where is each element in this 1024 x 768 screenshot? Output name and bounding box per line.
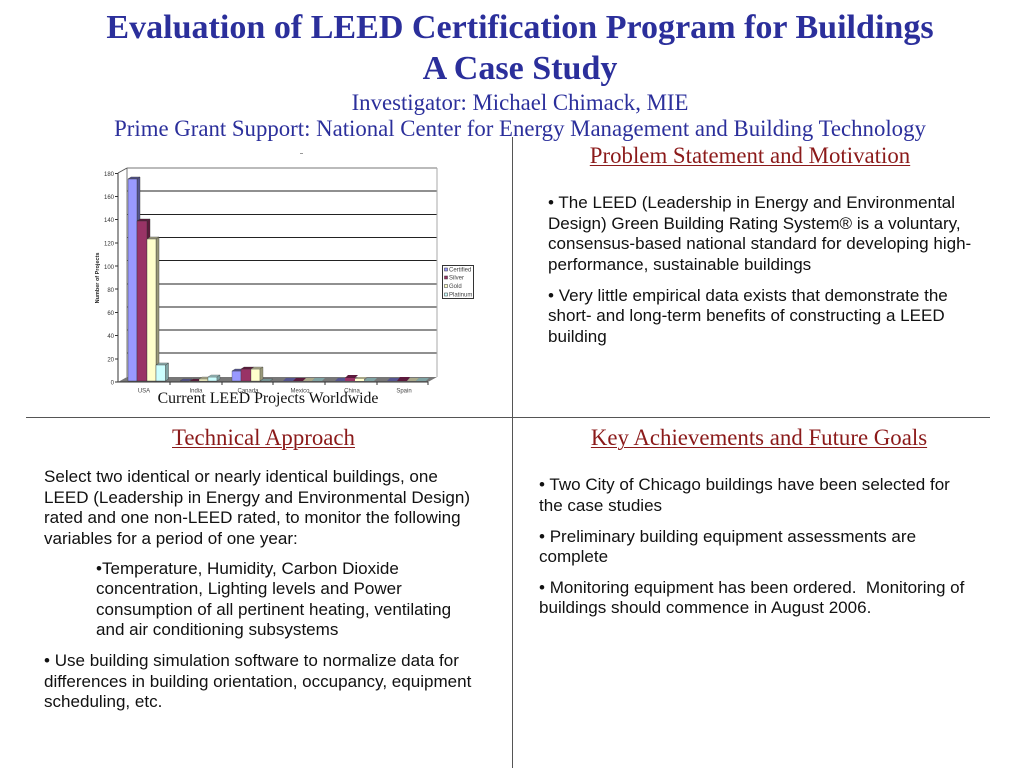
y axis labels: 140 <box>104 218 115 224</box>
text: simulation bullet: • Use building simulation software to normalize data for <box>44 651 459 670</box>
text: problem statement: consensus-based national standard for developing high- <box>548 234 971 253</box>
text: simulation bullet <box>44 651 472 711</box>
China bars <box>335 375 377 381</box>
text: approach intro: Select two identical or nearly identical buildings, one <box>44 467 438 486</box>
text: approach intro: LEED (Leadership in Energy and Environmental Design) <box>44 488 470 506</box>
text: achievement three: • Monitoring equipment has been ordered. Monitoring of <box>539 578 964 596</box>
text: problem statement: Design) Green Building Rating System® is a voluntary, <box>548 214 961 232</box>
text: simulation bullet: scheduling, etc. <box>44 692 162 711</box>
chart caption: Current LEED Projects Worldwide <box>158 390 378 407</box>
vertical divider <box>512 137 513 768</box>
y axis labels: 120 <box>104 242 115 248</box>
text: achievement one: the case studies <box>539 496 662 514</box>
text: achievement two <box>539 526 916 566</box>
text: problem statement second bullet: short- and long-term benefits of constructing a LEED <box>548 306 945 325</box>
x axis labels: India <box>189 388 203 394</box>
y axis labels <box>104 172 115 386</box>
y axis labels: 40 <box>107 334 115 340</box>
legend: Gold <box>449 284 462 290</box>
horizontal divider <box>26 417 990 418</box>
heading: technical approach: Technical Approach <box>172 425 355 450</box>
legend <box>442 266 474 298</box>
y axis title: Number of Projects <box>95 253 101 303</box>
grant support line: Prime Grant Support: National Center for Energy Management and Building Technology <box>114 116 926 141</box>
text: approach intro: variables for a period of one year: <box>44 528 298 548</box>
text: achievement one <box>539 475 950 514</box>
y axis labels: 180 <box>104 172 115 178</box>
legend: Certified <box>449 268 471 274</box>
text: simulation bullet: differences in building orientation, occupancy, equipment <box>44 672 471 690</box>
Mexico bars <box>283 378 325 381</box>
text: achievement two: • Preliminary building equipment assessments are <box>539 526 916 546</box>
title: Evaluation of LEED Certification Program for Buildings <box>106 9 934 46</box>
heading: problem statement: Problem Statement and Motivation <box>590 143 910 168</box>
text: problem statement second bullet <box>548 286 948 346</box>
text: monitored variables <box>96 558 451 639</box>
text: problem statement second bullet: • Very little empirical data exists that demonstrate the <box>548 286 948 304</box>
title: A Case Study <box>423 50 617 87</box>
Canada bars <box>232 367 273 381</box>
text: approach intro: rated and one non-LEED rated, to monitor the following <box>44 508 461 527</box>
title <box>106 9 934 87</box>
text: monitored variables: concentration, Lighting levels and Power <box>96 579 402 598</box>
x axis labels: Mexico <box>290 388 310 394</box>
y axis labels: 100 <box>104 265 115 271</box>
India bars <box>180 375 220 381</box>
x axis labels <box>138 388 412 394</box>
text: problem statement second bullet: building <box>548 326 607 346</box>
text: approach intro <box>44 467 470 548</box>
y axis labels: 60 <box>107 311 115 317</box>
y axis labels: 20 <box>107 358 115 364</box>
text: achievement three: buildings should commence in August 2006. <box>539 598 871 617</box>
text: monitored variables: consumption of all pertinent heating, ventilating <box>96 600 451 618</box>
x axis labels: Canada <box>237 388 259 394</box>
y axis labels: 0 <box>111 380 115 386</box>
text: achievement one: • Two City of Chicago buildings have been selected for <box>539 475 950 494</box>
y axis labels: 80 <box>107 288 115 294</box>
legend: Platinum <box>449 292 472 298</box>
heading: key achievements: Key Achievements and Future Goals <box>591 425 927 450</box>
text: achievement two: complete <box>539 547 608 566</box>
investigator line: Investigator: Michael Chimack, MIE <box>352 90 688 115</box>
bar chart: current LEED projects worldwide <box>95 153 474 394</box>
text: problem statement: performance, sustainable buildings <box>548 254 811 274</box>
text: achievement three <box>539 578 964 617</box>
text: monitored variables: •Temperature, Humidity, Carbon Dioxide <box>96 558 399 578</box>
USA bars <box>128 177 168 381</box>
x axis labels: USA <box>138 388 150 394</box>
text: problem statement: • The LEED (Leadership in Energy and Environmental <box>548 193 955 212</box>
x axis labels: China <box>344 388 360 394</box>
text: monitored variables: and air conditioning subsystems <box>96 620 338 639</box>
Spain bars <box>387 377 429 381</box>
tiny dash above chart <box>300 152 303 154</box>
legend: Silver <box>449 276 464 282</box>
x axis labels: Spain <box>396 388 412 394</box>
y axis labels: 160 <box>104 195 115 201</box>
text: problem statement <box>548 193 971 274</box>
